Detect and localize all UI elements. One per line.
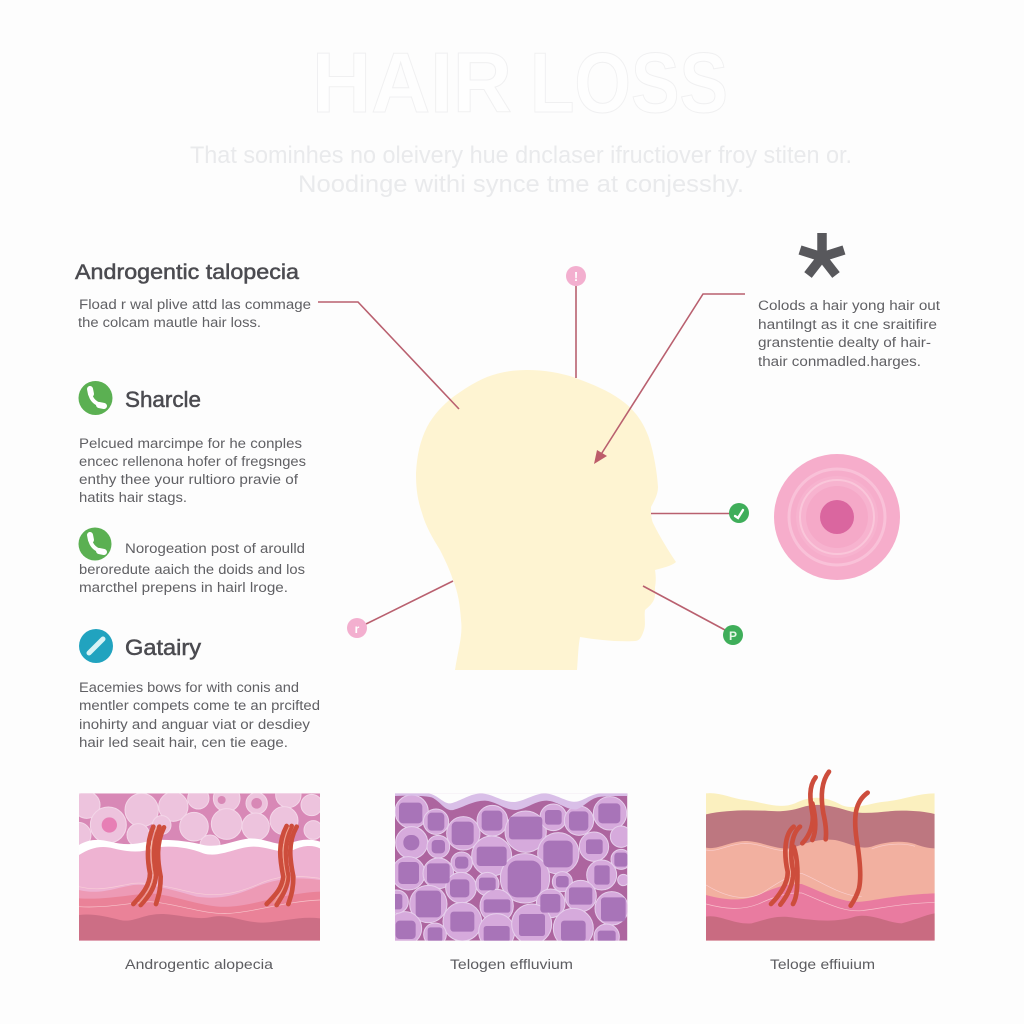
- panel: androgentic talopecia text: Androgentic talopecia: [75, 261, 299, 284]
- panel: sharcle: enthy thee your rultioro pravie of: [79, 472, 298, 487]
- icon: teal pencil: [79, 629, 113, 663]
- caption: Telogen effluvium: [450, 956, 573, 972]
- panel: gatairy: Eacemies bows for with conis and: [79, 680, 299, 695]
- subtitle: [190, 142, 852, 198]
- panel: norogeation: marcthel prepens in hairl lroge.: [79, 580, 288, 595]
- subtitle: That sominhes no oleivery hue dnclaser ifructiover froy stiten or.: [190, 142, 852, 169]
- cells: [79, 793, 320, 846]
- panel: androgentic talopecia text: the colcam mautle hair loss.: [78, 315, 261, 330]
- hair strands: [771, 772, 868, 906]
- title: [312, 36, 728, 131]
- panel: sharcle: hatits hair stags.: [79, 490, 187, 505]
- hair clumps: [133, 827, 153, 904]
- subtitle: Noodinge withi synce tme at conjesshy.: [298, 171, 744, 198]
- panel: norogeation: [78, 528, 305, 595]
- arrow: lower-left pink pin: [347, 581, 453, 638]
- layers: [79, 838, 320, 855]
- panel: androgentic alopecia diagram: [79, 793, 320, 941]
- cells: [395, 796, 628, 941]
- caption: Teloge effiuium: [770, 956, 875, 972]
- panel: right callout text: granstentie dealty of hair-: [758, 335, 931, 350]
- panel: telogen effluvium diagram: [395, 793, 628, 941]
- wavy top membrane: [395, 793, 628, 810]
- panel: right callout text: thair conmadled.harges.: [758, 354, 921, 369]
- panel: norogeation: beroredute aaich the doids and los: [79, 562, 305, 577]
- icon: green phone: [78, 381, 112, 415]
- icon: green phone: [78, 528, 112, 560]
- panel: telogen variant diagram: [706, 772, 935, 941]
- panel: sharcle: encec rellenona hofer of fregsnges: [79, 454, 306, 469]
- panel: gatairy: Gatairy: [125, 635, 201, 660]
- panel: androgentic talopecia text: [75, 261, 311, 330]
- panel: right callout text: [758, 298, 940, 369]
- panel: right callout text: Colods a hair yong hair out: [758, 298, 940, 313]
- panel: gatairy: hair led seait hair, cen tie eage.: [79, 735, 288, 750]
- title: HAIR: [312, 36, 512, 131]
- icon: pink follicle target: [774, 454, 900, 580]
- panel: sharcle: Pelcued marcimpe for he conples: [79, 436, 302, 451]
- arrow: top-left callout line: [318, 302, 459, 409]
- panel: gatairy: inohirty and anguar viat or desdiey: [79, 717, 310, 732]
- arrow: top-right callout arrow: [594, 294, 745, 464]
- arrow: top pin: !: [574, 269, 578, 284]
- arrow: lower-left pink pin: r: [355, 622, 360, 636]
- title: LOSS: [530, 36, 728, 131]
- icon: asterisk: [800, 233, 844, 275]
- panel: sharcle: Sharcle: [125, 387, 201, 412]
- arrow: right green check pin: [651, 503, 749, 523]
- panel: androgentic talopecia text: Fload r wal plive attd las commage: [79, 297, 311, 312]
- panel: gatairy: [79, 629, 320, 750]
- panel: right callout text: hantilngt as it cne sraitifire: [758, 317, 937, 332]
- icon: head silhouette: [416, 370, 676, 670]
- panel: norogeation: Norogeation post of aroulld: [125, 541, 305, 556]
- arrow: lower-right green pin: P: [729, 629, 737, 643]
- arrow: top pin: [566, 266, 586, 378]
- panel: gatairy: mentler compets come te an prcifted: [79, 698, 320, 713]
- caption: Androgentic alopecia: [125, 956, 273, 972]
- panel: sharcle: [78, 381, 306, 505]
- arrow: lower-right green pin: [643, 586, 743, 645]
